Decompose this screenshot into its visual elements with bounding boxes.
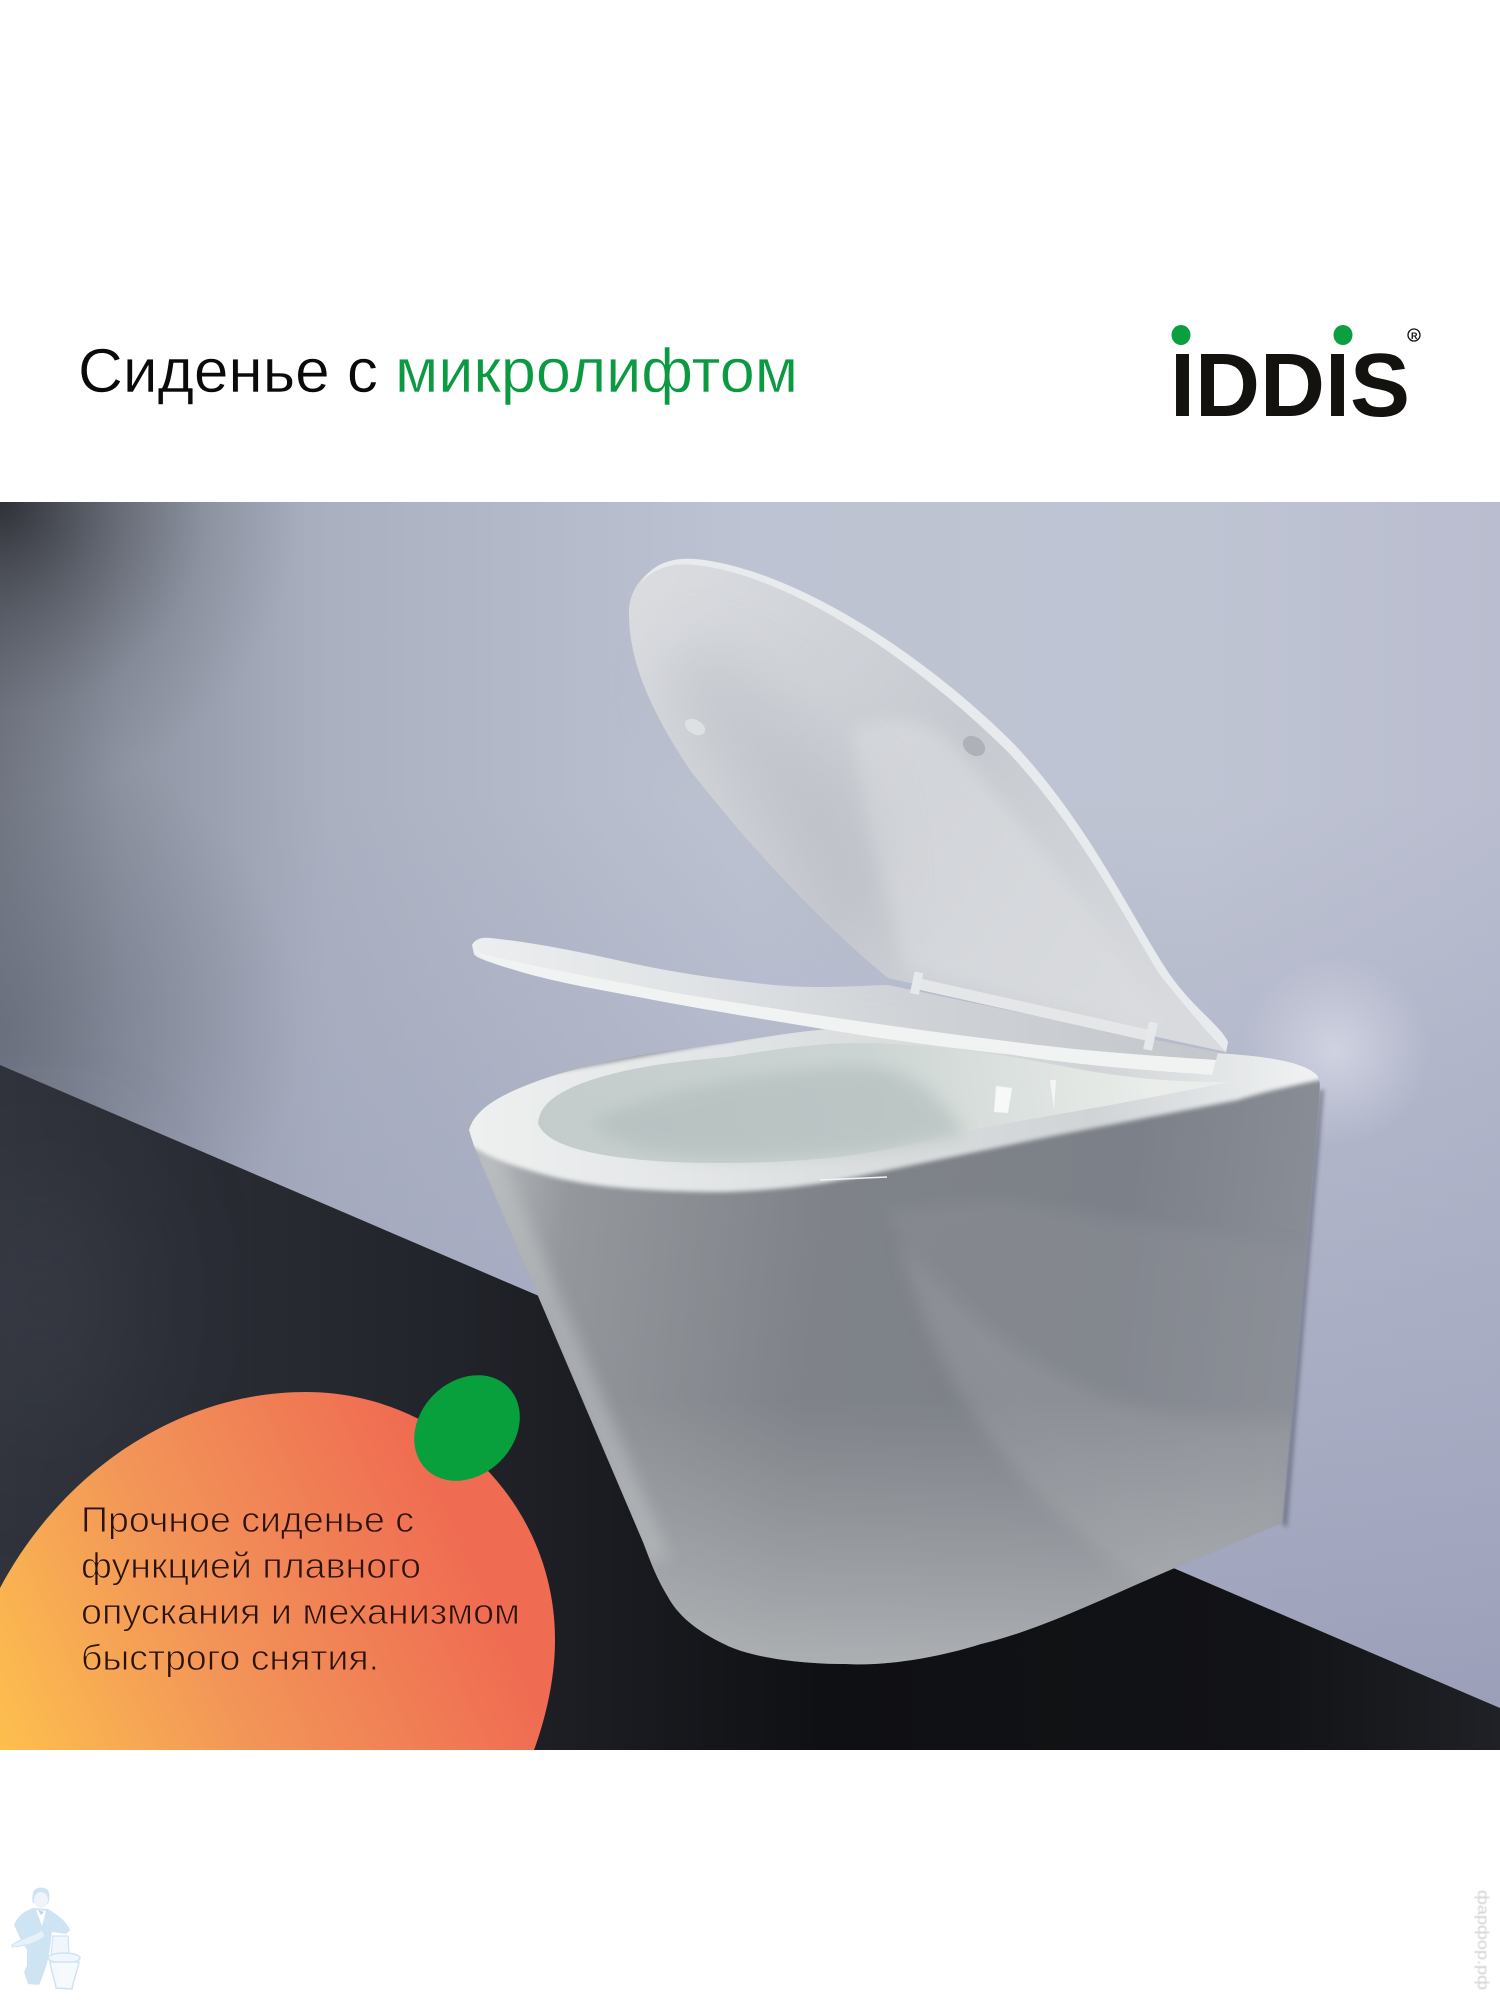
logo: IDDIS: IDDIS <box>1170 336 1410 436</box>
wall background <box>0 502 1500 1750</box>
title: микролифтом <box>395 337 798 406</box>
lid bumpers <box>685 719 705 735</box>
body reflection <box>913 1272 1174 1582</box>
floor <box>0 1065 1500 1750</box>
lid rim edge <box>640 559 1228 1052</box>
title <box>78 337 798 406</box>
toilet seat front edge <box>501 965 1216 1075</box>
rim <box>460 1020 1330 1192</box>
hinge bar <box>916 978 1150 1041</box>
callout text: функцией плавного <box>81 1545 421 1586</box>
toilet lid <box>629 559 1228 1052</box>
accent: green drop <box>393 1354 541 1502</box>
callout shape: orange blob <box>0 1392 555 1750</box>
watermark: plumber with toilet <box>12 1888 80 1989</box>
rim highlight <box>820 1177 887 1180</box>
toilet body <box>460 1020 1330 1680</box>
photo: wall-hung toilet with open soft-close seat <box>0 502 1500 1750</box>
lid light panel <box>861 726 1036 970</box>
watermark: vertical site label: фарфор.рф <box>1474 1890 1491 1990</box>
logo: IDDIS: R <box>1411 331 1418 341</box>
callout text <box>81 1499 520 1678</box>
bowl interior <box>538 1043 1231 1163</box>
callout text: Прочное сиденье с <box>81 1499 414 1540</box>
toilet seat surface <box>472 938 1218 1060</box>
callout text: опускания и механизмом <box>81 1591 520 1632</box>
wall shadow beside toilet <box>1282 1090 1324 1528</box>
callout text: быстрого снятия. <box>81 1637 379 1678</box>
title: Сиденье с <box>78 337 378 406</box>
